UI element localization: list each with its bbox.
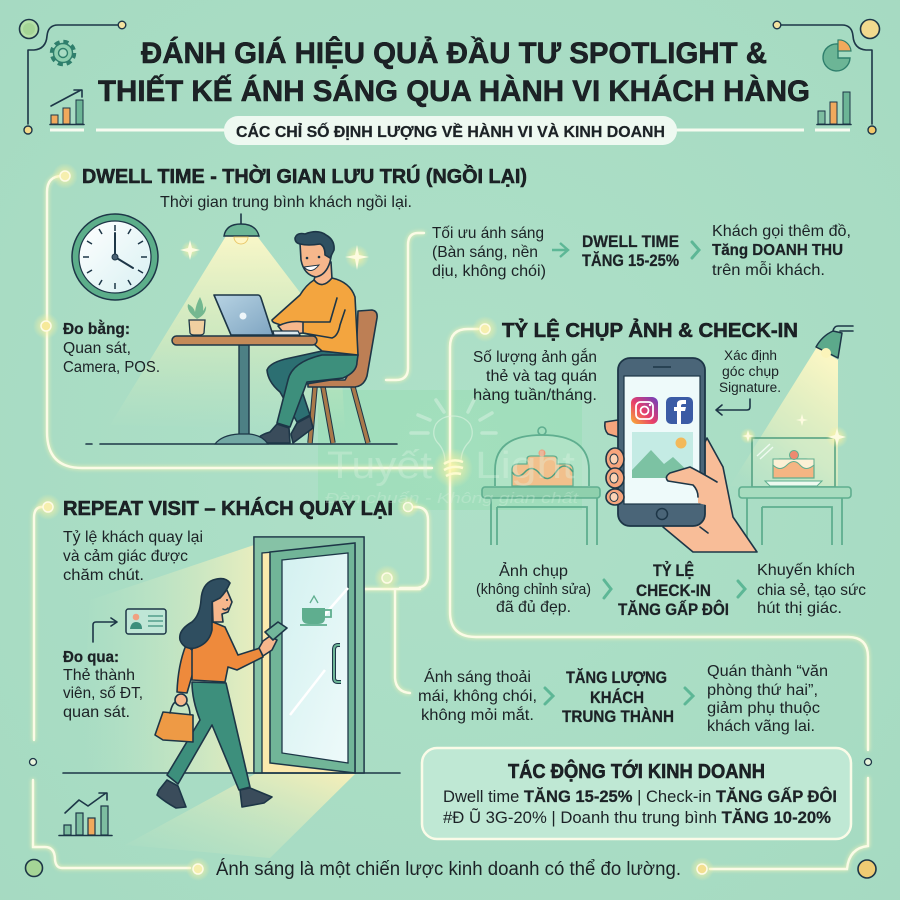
text: second office: Quán thành “văn bbox=[707, 663, 828, 680]
callout: signature angle: Xác định bbox=[724, 348, 777, 363]
right table with cake case bbox=[739, 438, 851, 545]
measure note: Đo qua: bbox=[63, 649, 119, 666]
chevron bbox=[738, 581, 745, 597]
chevron bbox=[692, 242, 699, 258]
text: revenue: Khách gọi thêm đồ, bbox=[712, 223, 851, 240]
repeat description: Tỷ lệ khách quay lại bbox=[63, 529, 203, 546]
text: encourage: Khuyến khích bbox=[757, 562, 855, 579]
repeat description bbox=[63, 529, 203, 584]
text: revenue: Tăng DOANH THU bbox=[712, 242, 843, 259]
result: loyal customers: TĂNG LƯỢNG bbox=[566, 668, 667, 687]
connector nodes bbox=[26, 163, 876, 881]
icon: spot lamp bbox=[816, 326, 853, 358]
measure note: viên, số ĐT, bbox=[63, 685, 143, 702]
callout: signature angle: Signature. bbox=[719, 380, 781, 395]
door bbox=[254, 537, 364, 773]
result: loyal customers: TRUNG THÀNH bbox=[562, 707, 674, 726]
text: encourage: hút thị giác. bbox=[757, 600, 842, 617]
sparkles bbox=[740, 414, 848, 448]
title: ĐÁNH GIÁ HIỆU QUẢ ĐẦU TƯ SPOTLIGHT & bbox=[141, 36, 767, 70]
icon: instagram bbox=[631, 397, 658, 424]
text: comfort light: Ánh sáng thoải bbox=[424, 667, 531, 686]
text: second office: phòng thứ hai”, bbox=[707, 682, 818, 699]
text: encourage: chia sẻ, tạo sức bbox=[757, 582, 866, 599]
result: loyal customers: KHÁCH bbox=[590, 688, 644, 707]
heading: dwell time: DWELL TIME - THỜI GIAN LƯU TRÚ (NGỒI LẠI) bbox=[82, 164, 527, 188]
left table with cake dome bbox=[482, 427, 600, 545]
panel: dwell time bbox=[63, 164, 851, 444]
measure note: Camera, POS. bbox=[63, 359, 160, 376]
title: THIẾT KẾ ÁNH SÁNG QUA HÀNH VI KHÁCH HÀNG bbox=[98, 74, 810, 108]
result: dwell time up: DWELL TIME bbox=[582, 232, 679, 251]
icon: bars right bbox=[817, 92, 851, 124]
woman bbox=[155, 579, 287, 808]
check-in description bbox=[473, 347, 597, 404]
panel: check-in bbox=[473, 318, 866, 619]
header frame decoration left bbox=[20, 20, 126, 134]
icon: coffee cup bbox=[300, 596, 331, 625]
panel: business impact: #Đ Ũ 3G-20% | Doanh thu trung bình TĂNG 10-20% bbox=[443, 808, 831, 827]
text: photo: (không chỉnh sửa) bbox=[476, 582, 591, 598]
repeat description: và cảm giác được bbox=[63, 548, 188, 565]
text: optimization: (Bàn sáng, nền bbox=[432, 244, 538, 261]
icon: ceiling lamp bbox=[224, 214, 259, 244]
icon: growth chart bbox=[59, 793, 112, 836]
connector lines bbox=[33, 176, 868, 869]
measure note: quan sát. bbox=[63, 704, 130, 721]
floor bbox=[63, 772, 400, 774]
text: second office: giảm phụ thuộc bbox=[707, 700, 820, 717]
measure note: Đo bằng: bbox=[63, 319, 130, 338]
callout: signature angle: góc chụp bbox=[722, 364, 779, 379]
watermark background panel bbox=[318, 390, 582, 510]
table and laptop bbox=[172, 295, 317, 444]
light from door bbox=[80, 545, 355, 858]
watermark logo overlay bbox=[325, 400, 579, 507]
photo thumbnail bbox=[632, 432, 693, 478]
panel: business impact bbox=[422, 748, 851, 839]
measure note bbox=[63, 649, 143, 721]
icon: growth bars left bbox=[50, 90, 84, 124]
text: photo: Ảnh chụp bbox=[499, 561, 568, 580]
text: optimization bbox=[432, 225, 546, 280]
text: comfort light: không mỏi mắt. bbox=[421, 705, 534, 724]
text: comfort light: mái, không chói, bbox=[418, 688, 537, 705]
callout: signature angle bbox=[716, 348, 781, 415]
check-in description: hàng tuần/tháng. bbox=[473, 387, 597, 404]
light cone: lamp bbox=[110, 236, 345, 430]
floor bbox=[86, 443, 397, 445]
text: photo: đã đủ đẹp. bbox=[496, 599, 571, 616]
text: optimization: dịu, không chói) bbox=[432, 263, 546, 280]
text: second office: khách vãng lai. bbox=[707, 718, 815, 735]
watermark logo overlay: Đèn chuẩn - Không gian chất bbox=[325, 490, 579, 507]
result: dwell time up bbox=[582, 232, 679, 270]
dwell description: Thời gian trung bình khách ngồi lại. bbox=[160, 194, 412, 211]
watermark logo overlay: Tuyết bbox=[327, 445, 432, 487]
icon: clock bbox=[72, 214, 158, 300]
watermark logo overlay: Light bbox=[475, 445, 576, 487]
result: loyal customers bbox=[562, 668, 674, 726]
heading: check-in: TỶ LỆ CHỤP ẢNH & CHECK-IN bbox=[502, 318, 798, 342]
icon: member card bbox=[93, 609, 166, 642]
footer statement: Ánh sáng là một chiến lược kinh doanh có thể đo lường. bbox=[216, 859, 681, 880]
panel: repeat visit bbox=[59, 497, 828, 858]
text: photo bbox=[476, 561, 591, 616]
result: check-in doubles: TĂNG GẤP ĐÔI bbox=[618, 600, 729, 619]
chevron bbox=[685, 688, 693, 704]
heading: repeat visit: REPEAT VISIT – KHÁCH QUAY LẠI bbox=[63, 497, 393, 520]
panel: business impact: TÁC ĐỘNG TỚI KINH DOANH bbox=[508, 759, 765, 783]
measure note: Thẻ thành bbox=[63, 667, 135, 684]
text: revenue: trên mỗi khách. bbox=[712, 260, 825, 279]
title bbox=[98, 36, 810, 108]
chevron bbox=[604, 580, 611, 598]
icon: gear bbox=[52, 42, 74, 64]
header frame decoration right bbox=[773, 20, 880, 134]
text: revenue bbox=[712, 223, 851, 279]
result: dwell time up: TĂNG 15-25% bbox=[582, 251, 679, 270]
check-in description: Số lượng ảnh gắn bbox=[473, 347, 597, 366]
result: check-in doubles: CHECK-IN bbox=[636, 581, 711, 600]
icon: facebook bbox=[666, 397, 693, 424]
icon: pie chart bbox=[823, 40, 851, 71]
right light cone bbox=[730, 347, 838, 486]
panel: business impact: Dwell time TĂNG 15-25% | Check-in TĂNG GẤP ĐÔI bbox=[443, 787, 837, 806]
text: optimization: Tối ưu ánh sáng bbox=[432, 225, 544, 242]
arrow bbox=[552, 243, 568, 257]
repeat description: chăm chút. bbox=[63, 567, 144, 584]
phone in hand bbox=[605, 358, 757, 552]
text: second office bbox=[707, 663, 828, 735]
chevron bbox=[545, 688, 553, 704]
sparkles bbox=[180, 240, 369, 270]
result: check-in doubles: TỶ LỆ bbox=[653, 561, 694, 580]
subtitle pill: CÁC CHỈ SỐ ĐỊNH LƯỢNG VỀ HÀNH VI VÀ KINH DOANH bbox=[236, 121, 665, 141]
text: comfort light bbox=[418, 667, 537, 724]
check-in description: thẻ và tag quán bbox=[486, 368, 597, 385]
text: encourage bbox=[757, 562, 866, 617]
subtitle pill bbox=[50, 116, 850, 145]
measure note bbox=[63, 319, 160, 376]
measure note: Quan sát, bbox=[63, 340, 131, 357]
result: check-in doubles bbox=[618, 561, 729, 619]
man bbox=[256, 232, 358, 443]
chair bbox=[308, 310, 377, 443]
